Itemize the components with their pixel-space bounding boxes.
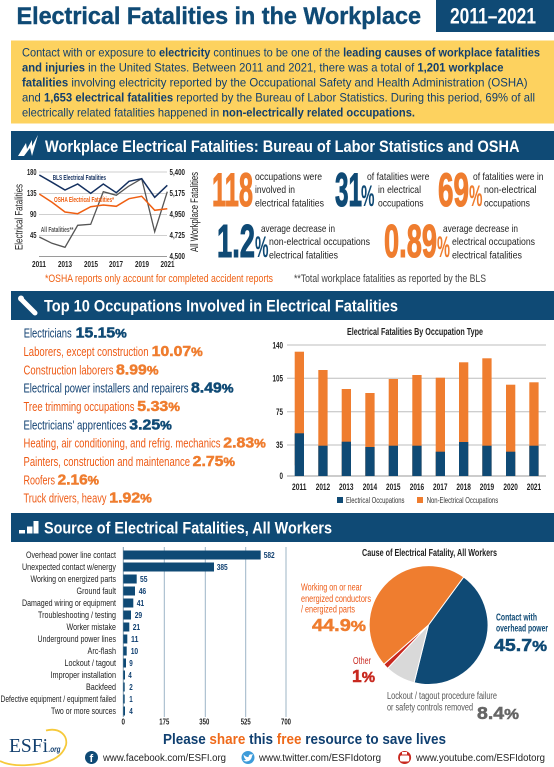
label: lockout tagout: or safety controls removed [387, 703, 473, 714]
horizontal bar chart: source of fatalities: Troubleshooting / testing [38, 610, 116, 621]
stat: 31 percent: in electrical [378, 184, 421, 196]
horizontal bar chart: source of fatalities: Worker mistake [66, 622, 116, 633]
label: contact with overhead power [494, 613, 548, 655]
intro text panel [11, 40, 554, 124]
label: contact with overhead power: 45.7 % [494, 635, 547, 655]
stat: 31 percent [335, 163, 430, 216]
label: other: 1% [352, 666, 375, 686]
horizontal bar chart: source of fatalities: Underground power lines [38, 634, 116, 645]
stacked bar chart: by occupation type: 35 [276, 440, 283, 450]
stacked bar chart: by occupation type: 2021 [527, 482, 541, 492]
social: facebook [85, 751, 226, 765]
horizontal bar chart: source of fatalities: 11 [131, 634, 139, 644]
horizontal bar chart: source of fatalities: Working on energized parts [30, 574, 116, 585]
horizontal bar chart: source of fatalities: 582 [264, 550, 275, 560]
label: other: Other [353, 656, 371, 667]
stat: 1.2 percent decrease: electrical fatalities [269, 250, 338, 262]
section header: workplace electrical fatalities [11, 131, 554, 160]
occupation: HVAC mechanics: 2.83% [223, 436, 266, 452]
horizontal bar chart: source of fatalities: 41 [137, 598, 144, 608]
chart title: Electrical Fatalities By Occupation Type [347, 326, 483, 338]
stacked bar chart: by occupation type: 2015 [386, 482, 400, 492]
label: working on energized: 44.9 % [312, 615, 366, 635]
occupation: painters: Painters, construction and maintenance [24, 454, 190, 469]
line chart: electrical fatalities and all fatalities: 4,500 [170, 251, 185, 261]
line chart: electrical fatalities and all fatalities: 5,400 [170, 167, 185, 177]
section header: top 10 occupations: Top 10 Occupations Involved in Electrical Fatalities [44, 298, 398, 316]
stat: 0.89 percent decrease: % [437, 231, 450, 264]
chart title: Cause of Electrical Fatality, All Workers [362, 547, 497, 559]
line chart: electrical fatalities and all fatalities: 90 [30, 209, 37, 219]
horizontal bar chart: source of fatalities: Ground fault [76, 586, 116, 597]
horizontal bar chart: source of fatalities: Improper installation [50, 670, 116, 681]
stat: 31 percent: 31 [335, 163, 362, 216]
line chart: electrical fatalities and all fatalities: Electrical Fatalities [14, 184, 26, 250]
occupation: roofers [24, 472, 99, 488]
label: lockout tagout [387, 691, 519, 723]
social: facebook: www.facebook.com/ESFI.org [102, 752, 226, 764]
occupation: electricians: Electricians [24, 326, 72, 341]
label: lockout tagout: 8.4% [477, 703, 519, 723]
line chart: electrical fatalities and all fatalities: OSHA Electrical Fatalities* [54, 195, 114, 204]
horizontal bar chart: source of fatalities: Overhead power line contact [26, 550, 116, 561]
line chart: electrical fatalities and all fatalities: 4,950 [170, 209, 185, 219]
occupation: electricians: 15.15 % [76, 326, 127, 342]
logo: ESFi.org [0, 730, 66, 765]
section header: source of electrical fatalities [11, 513, 554, 542]
stat: 118 occupations: involved in [255, 184, 295, 196]
logo: ESFi.org: ESFi [9, 735, 48, 757]
social: twitter: www.twitter.com/ESFIdotorg [258, 752, 381, 764]
stat: 1.2 percent decrease: 1.2 [217, 215, 255, 267]
stacked bar chart: by occupation type: 2013 [339, 482, 354, 492]
stat: 118 occupations: electrical fatalities [255, 198, 324, 210]
occupation: apprentices: 3.25% [129, 417, 172, 433]
horizontal bar chart: source of fatalities: 385 [217, 562, 228, 572]
label: other [352, 656, 375, 686]
horizontal bar chart: source of fatalities: 4 [128, 670, 132, 680]
occupation: roofers: Roofers [24, 472, 55, 487]
label: working on energized [301, 583, 371, 635]
intro text panel: Contact with or exposure to electricity continues to be one of the leading causes of workplace fatalities [22, 46, 540, 60]
horizontal bar chart: source of fatalities: 21 [133, 622, 140, 632]
stacked bar chart: by occupation type: 2017 [433, 482, 448, 492]
line chart: electrical fatalities and all fatalities: 180 [27, 167, 37, 177]
line chart: electrical fatalities and all fatalities: 2013 [58, 259, 72, 269]
line chart: electrical fatalities and all fatalities: 2011 [32, 259, 46, 269]
logo: ESFi.org: .org [48, 744, 61, 754]
occupation: apprentices: Electricians' apprentices [24, 417, 127, 432]
line chart: electrical fatalities and all fatalities: 5,175 [170, 188, 185, 198]
icon: lightning bolt [18, 135, 38, 156]
line chart: electrical fatalities and all fatalities: 45 [30, 230, 37, 240]
intro text panel: and 1,653 electrical fatalities reported by the Bureau of Labor Statistics. During this period, 69% of all [22, 90, 535, 104]
horizontal bar chart: source of fatalities: 1 [129, 694, 133, 704]
line chart: electrical fatalities and all fatalities [14, 167, 201, 269]
stat: 1.2 percent decrease: % [255, 231, 268, 264]
line chart: electrical fatalities and all fatalities: 135 [27, 188, 37, 198]
footnote: OSHA: *OSHA reports only account for completed accident reports [45, 273, 273, 285]
legend [337, 495, 498, 505]
line chart: electrical fatalities and all fatalities: 4,725 [170, 230, 185, 240]
stat: 0.89 percent decrease: average decrease in [443, 223, 518, 235]
horizontal bar chart: source of fatalities: Lockout / tagout [64, 658, 116, 669]
stat: 69 percent: occupations [484, 198, 530, 210]
pie chart: cause of electrical fatality [301, 547, 548, 723]
stat: 31 percent: % [361, 180, 374, 213]
section header: source of electrical fatalities: Source of Electrical Fatalities, All Workers [44, 520, 332, 538]
horizontal bar chart: source of fatalities: 46 [139, 586, 146, 596]
horizontal bar chart: source of fatalities: 2 [129, 682, 133, 692]
horizontal bar chart: source of fatalities: 10 [131, 646, 138, 656]
line chart: electrical fatalities and all fatalities: All Workplace Fatalities [189, 172, 201, 252]
horizontal bar chart: source of fatalities: 700 [281, 716, 291, 726]
occupation: laborers: Laborers, except construction [24, 344, 148, 359]
stat: 31 percent: occupations [378, 198, 424, 210]
horizontal bar chart: source of fatalities: 0 [122, 716, 125, 726]
stacked bar chart: by occupation type: 2016 [410, 482, 424, 492]
horizontal bar chart: source of fatalities: Unexpected contact w/energy [22, 562, 116, 573]
stat: 69 percent: non-electrical [484, 184, 536, 196]
line chart: electrical fatalities and all fatalities: All Fatalities** [41, 225, 73, 234]
stacked bar chart: by occupation type: 2019 [480, 482, 494, 492]
horizontal bar chart: source of fatalities: Arc-flash [88, 646, 116, 657]
label: lockout tagout: Lockout / tagout procedure failure [387, 691, 497, 702]
legend: Electrical Occupations [346, 495, 404, 505]
horizontal bar chart: source of fatalities: 29 [135, 610, 142, 620]
intro text panel: electrically related fatalities happened in non-electrically related occupations. [22, 106, 415, 120]
social: facebook: f [90, 753, 94, 765]
stacked bar chart: by occupation type: 2012 [316, 482, 330, 492]
horizontal bar chart: source of fatalities: 350 [199, 716, 209, 726]
section header: top 10 occupations [11, 291, 554, 320]
label: working on energized: energized conductors [301, 594, 371, 605]
horizontal bar chart: source of fatalities [0, 547, 291, 726]
pie slices [369, 566, 488, 684]
icon: wrench [18, 296, 35, 313]
horizontal bar chart: source of fatalities: 525 [241, 716, 251, 726]
occupation: roofers: 2.16% [58, 472, 99, 488]
horizontal bar chart: source of fatalities: 55 [140, 574, 148, 584]
title: Electrical Fatalities in the Workplace [16, 3, 421, 30]
social: youtube: www.youtube.com/ESFIdotorg [415, 752, 545, 764]
horizontal bar chart: source of fatalities: Defective equipment / equipment failed [0, 694, 116, 705]
occupation: painters: 2.75% [193, 454, 235, 470]
stacked bar chart: by occupation type: 2011 [292, 482, 306, 492]
stacked bar chart: by occupation type: 75 [276, 407, 283, 417]
occupation: tree trimming: 5.33% [137, 399, 180, 415]
intro text panel: and injuries in the United States. Between 2011 and 2021, there was a total of 1,201 workplace [22, 60, 504, 74]
horizontal bar chart: source of fatalities: 4 [129, 706, 133, 716]
stat: 0.89 percent decrease: 0.89 [384, 215, 437, 267]
stat: 1.2 percent decrease [217, 215, 370, 267]
stat: 69 percent [438, 163, 544, 216]
occupation: electricians [24, 326, 127, 342]
horizontal bar chart: source of fatalities: 175 [159, 716, 169, 726]
stat: 118 occupations: occupations were [255, 171, 322, 183]
occupation: truck drivers: 1.92% [109, 491, 152, 507]
stacked bar chart: by occupation type: 2020 [503, 482, 518, 492]
stacked bar chart: by occupation type: 140 [272, 340, 283, 350]
legend: Non-Electrical Occupations [427, 495, 498, 505]
label: working on energized: / energized parts [301, 605, 355, 616]
line chart: electrical fatalities and all fatalities: 2019 [135, 259, 149, 269]
stat: 31 percent: of fatalities were [367, 171, 430, 183]
list: top 10 occupations [24, 326, 266, 507]
stacked bar chart: by occupation type: 2014 [363, 482, 377, 492]
occupation: electrical power installers: Electrical power installers and repairers [24, 381, 189, 396]
occupation: tree trimming: Tree trimming occupations [24, 399, 135, 414]
occupation: construction laborers: 8.99% [116, 362, 159, 378]
occupation: HVAC mechanics: Heating, air conditioning, and refrig. mechanics [24, 436, 221, 451]
stacked bar chart: by occupation type [272, 326, 546, 505]
stat: 1.2 percent decrease: average decrease in [261, 223, 335, 235]
horizontal bar chart: source of fatalities: 9 [129, 658, 133, 668]
stacked bar chart: by occupation type: 2018 [456, 482, 471, 492]
call to action: Please share this free resource to save lives [163, 731, 446, 748]
occupation: truck drivers: Truck drivers, heavy [24, 491, 107, 506]
line chart: electrical fatalities and all fatalities: BLS Electrical Fatalities [53, 173, 106, 182]
stat: 0.89 percent decrease [384, 215, 535, 267]
occupation: construction laborers: Construction laborers [24, 362, 114, 377]
stat: 69 percent: 69 [438, 163, 469, 216]
line chart: electrical fatalities and all fatalities: 2017 [109, 259, 123, 269]
stat: 1.2 percent decrease: non-electrical occupations [269, 236, 370, 248]
stat: 69 percent: % [469, 180, 482, 213]
stat: 118 occupations [212, 163, 324, 216]
horizontal bar chart: source of fatalities: Two or more sources [51, 706, 116, 717]
line chart: electrical fatalities and all fatalities: 2021 [160, 259, 175, 269]
stat: 0.89 percent decrease: electrical occupations [452, 236, 535, 248]
footnote: BLS: **Total workplace fatalities as reported by the BLS [294, 273, 486, 285]
occupation: electrical power installers: 8.49% [191, 381, 234, 397]
stacked bar chart: by occupation type: 105 [272, 374, 283, 384]
line chart: electrical fatalities and all fatalities: 2015 [84, 259, 98, 269]
label: working on energized: Working on or near [301, 583, 362, 594]
date range badge [436, 0, 554, 32]
stat: 0.89 percent decrease: electrical fatalities [452, 250, 522, 262]
horizontal bar chart: source of fatalities: Backfeed [86, 682, 116, 693]
occupation: laborers: 10.07 % [152, 344, 203, 360]
intro text panel: fatalities involving electricity reported by the Occupational Safety and Health Administration (OSHA) [22, 76, 528, 90]
stat: 118 occupations: 118 [212, 163, 253, 216]
icon: bar chart [19, 521, 38, 534]
horizontal bar chart: source of fatalities: Damaged wiring or equipment [22, 598, 116, 609]
stacked bar chart: by occupation type: 0 [280, 471, 283, 481]
